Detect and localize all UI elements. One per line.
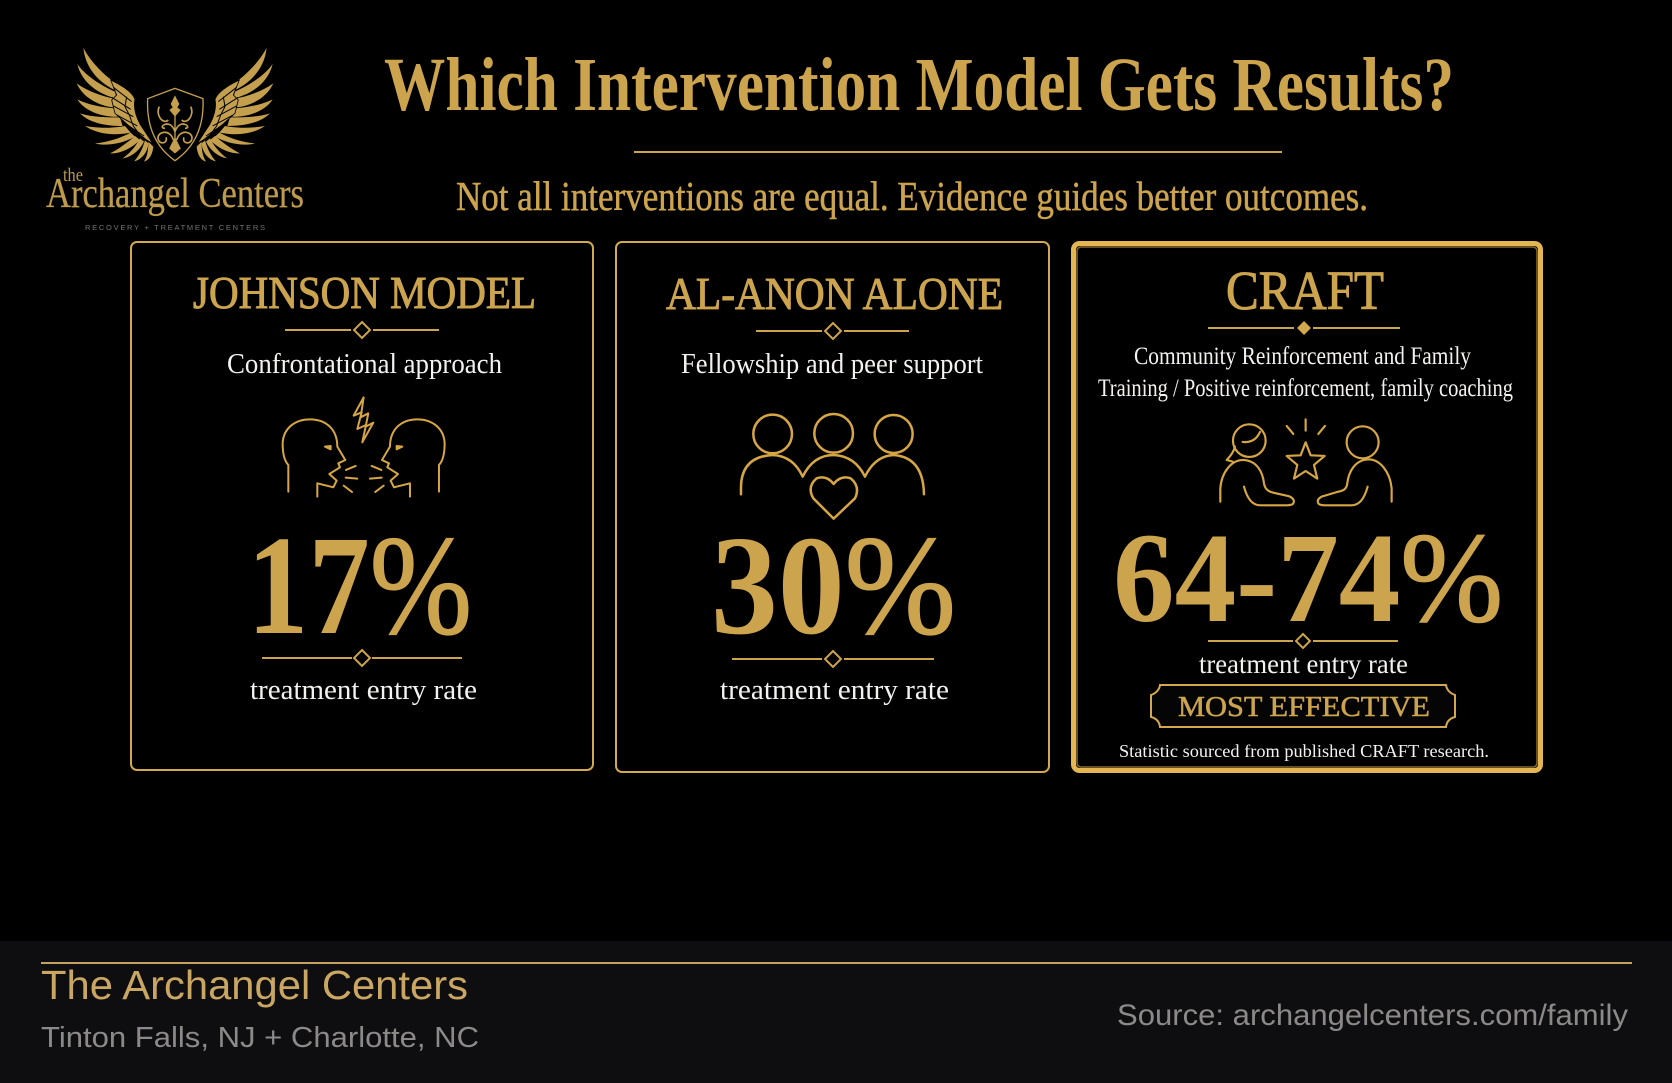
- description: Training / Positive reinforcement, family coaching: [1098, 375, 1513, 402]
- logo tagline: RECOVERY + TREATMENT CENTERS: [85, 223, 265, 232]
- stat label: treatment entry rate: [1199, 649, 1408, 679]
- icon: coach and family with star: [1220, 419, 1392, 505]
- icon: winged shield: [77, 47, 273, 162]
- card border: [1074, 244, 1540, 770]
- stat label: treatment entry rate: [250, 674, 477, 706]
- description: Fellowship and peer support: [681, 348, 983, 380]
- stat label: treatment entry rate: [720, 674, 949, 706]
- statistic: 64-74%: [1113, 507, 1503, 649]
- panel: Al-Anon Alone: [616, 242, 1049, 772]
- logo wordmark small: the: [63, 165, 83, 186]
- description: [1098, 343, 1513, 402]
- divider ornament: [1208, 321, 1400, 335]
- badge: most effective: MOST EFFECTIVE: [1178, 692, 1430, 723]
- footer: [0, 941, 1672, 1083]
- divider ornament: [285, 322, 439, 338]
- divider ornament: [262, 650, 462, 666]
- description: Confrontational approach: [227, 348, 502, 380]
- card border: [616, 242, 1049, 772]
- panel: Johnson Model: [131, 242, 593, 770]
- badge: most effective: [1151, 685, 1455, 727]
- icon: confronting heads: [283, 397, 445, 497]
- heading: AL-ANON ALONE: [666, 268, 1003, 319]
- title: Which Intervention Model Gets Results?: [384, 43, 1454, 127]
- heading: CRAFT: [1226, 260, 1384, 321]
- logo wordmark: Archangel Centers: [46, 171, 304, 217]
- organisation name: The Archangel Centers: [41, 962, 468, 1008]
- source note: Statistic sourced from published CRAFT research.: [1119, 741, 1489, 761]
- card border: [131, 242, 593, 770]
- statistic: 30%: [711, 506, 956, 664]
- panel: CRAFT: [1074, 244, 1540, 770]
- statistic: 17%: [247, 506, 472, 664]
- locations: Tinton Falls, NJ + Charlotte, NC: [41, 1022, 479, 1054]
- footer background: [0, 941, 1672, 1083]
- source: Source: archangelcenters.com/family: [1117, 999, 1628, 1032]
- divider ornament: [1208, 634, 1398, 648]
- heading: JOHNSON MODEL: [193, 267, 536, 318]
- description: Community Reinforcement and Family: [1134, 343, 1471, 370]
- subtitle: Not all interventions are equal. Evidence guides better outcomes.: [456, 173, 1368, 219]
- divider ornament: [756, 323, 909, 339]
- logo: [46, 47, 304, 232]
- icon: group with heart: [741, 414, 924, 519]
- divider ornament: [732, 651, 934, 667]
